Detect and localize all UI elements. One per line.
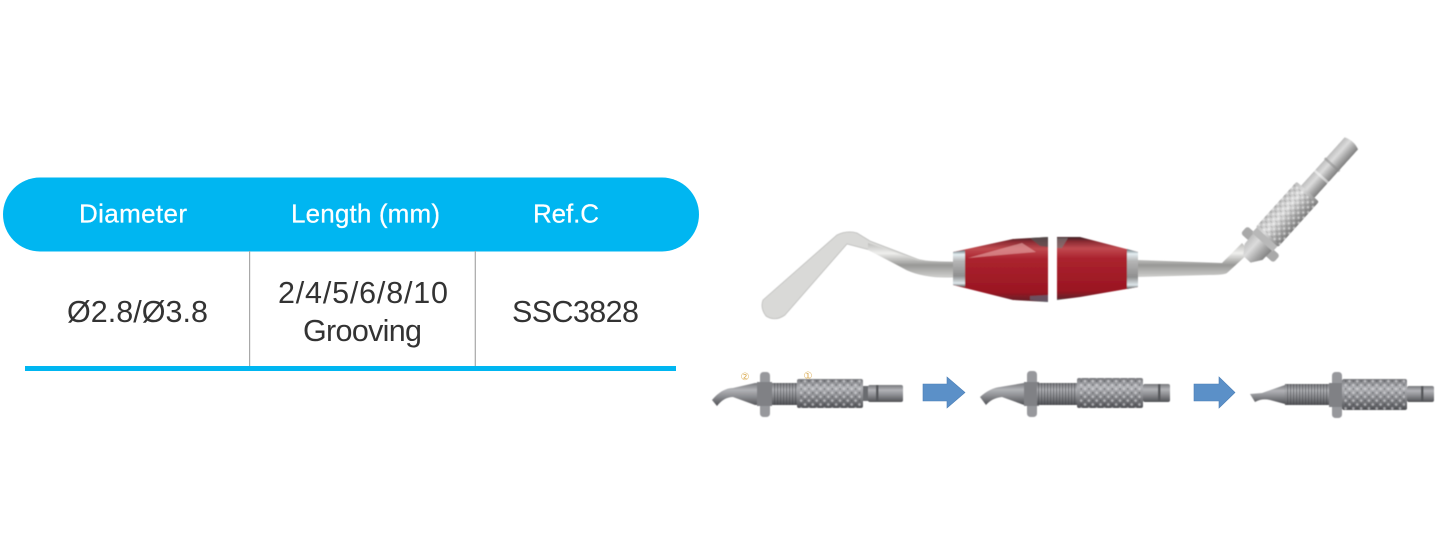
header: Length (mm): Length (mm): [291, 198, 440, 228]
table header bar: [3, 178, 699, 252]
marker 1: ①: [804, 371, 813, 382]
tool step 2: [980, 371, 1170, 417]
instrument left: red handle: [953, 237, 1048, 302]
marker 2: ②: [741, 372, 750, 383]
instrument right: red handle: [1057, 237, 1138, 300]
specification table: [3, 178, 699, 371]
tool step 3: [1250, 372, 1434, 418]
arrow 2: [1194, 377, 1235, 408]
double-ended instrument: [762, 127, 1369, 319]
cell: length values: [278, 276, 448, 348]
instrument right: knurled tip holder: [1231, 127, 1369, 274]
cell: reference code: SSC3828: [512, 295, 639, 329]
table bottom rule: [25, 366, 676, 371]
cell: diameter value: Ø2.8/Ø3.8: [67, 295, 208, 329]
tool sequence: [712, 371, 1434, 418]
header: Ref.C: Ref.C: [533, 198, 599, 228]
cell: length values: Grooving: [303, 314, 422, 348]
instrument left: paddle blade and shaft: [762, 232, 953, 319]
table column dividers: [249, 251, 476, 367]
cell: length values: 2/4/5/6/8/10: [278, 276, 448, 310]
arrow 1: [923, 377, 965, 408]
instrument right: shaft: [1138, 243, 1250, 277]
tool step 1: [712, 372, 903, 417]
header: Diameter: Diameter: [79, 198, 187, 228]
